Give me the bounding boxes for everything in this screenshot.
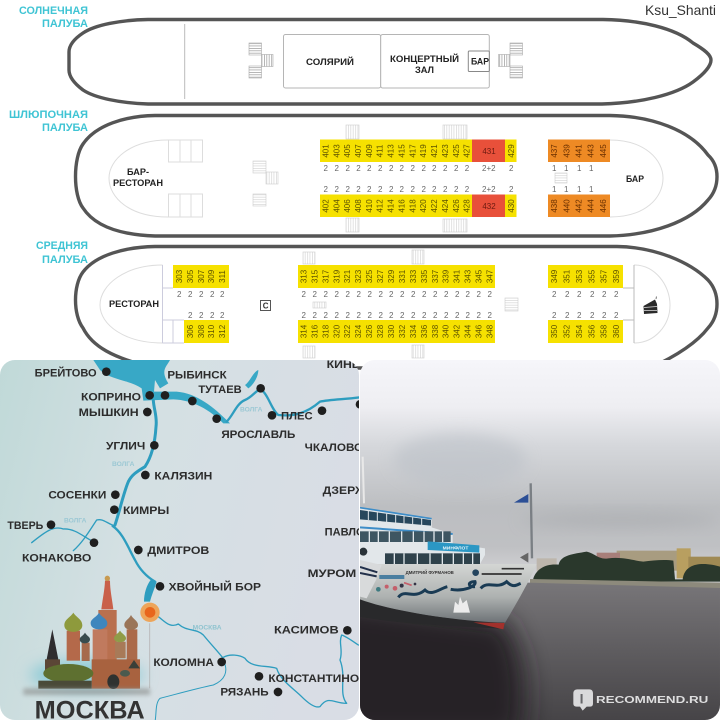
cabins: 313-348: 344 (464, 324, 473, 338)
panel: boat deck (9, 109, 717, 236)
far bank: buildings and trees (530, 548, 720, 588)
berth counts: middle deck (177, 290, 619, 320)
room: bar (468, 51, 489, 72)
cabins: 313-348: 342 (453, 324, 462, 338)
cabins: 437-446: 440 (562, 199, 571, 213)
cabins: 401-429: 426 (452, 199, 461, 213)
hull wave pattern (398, 582, 521, 597)
city names: СОСЕНКИ (48, 490, 106, 502)
ship (359, 457, 537, 629)
cabins: 313-348: 341 (453, 269, 462, 283)
berth counts: boat deck: 1111 (552, 185, 594, 194)
cabins: 401-429: 416 (398, 199, 406, 213)
stairs: left (249, 43, 273, 78)
sky (360, 360, 720, 593)
city names: РЯЗАНЬ (220, 687, 269, 699)
bar-restaurant room: БАР- (127, 167, 149, 177)
cabins: 349-360: 360 (612, 324, 621, 338)
watermark: recommend.ru: RECOMMEND.RU (596, 695, 708, 706)
cabins: 349-360 (548, 265, 623, 343)
cabins: 313-348: 318 (321, 324, 330, 338)
restaurant room (100, 265, 184, 343)
hull graffiti (376, 583, 416, 592)
cabins: 313-348: 345 (475, 269, 484, 283)
cabins: 401-429: 428 (463, 199, 472, 213)
bar room: bow (610, 140, 663, 217)
cabins: 349-360: 359 (612, 269, 621, 283)
heading: middle deck: СРЕДНЯЯ (36, 240, 88, 252)
cabins: 349-360: 349 (550, 269, 559, 283)
city names: ЧКАЛОВСК (305, 442, 370, 454)
room: concert hall: ЗАЛ (415, 65, 434, 75)
Moscow marker (140, 603, 160, 688)
cabins: 349-360: 352 (563, 324, 572, 338)
cabins: 313-348: 324 (354, 324, 363, 338)
superstructure (360, 508, 485, 564)
cabins: 313-348: 337 (431, 269, 440, 283)
cabins: 313-348: 330 (387, 324, 396, 338)
cabins: 401-429: 420 (419, 199, 428, 213)
cabins: 401-429: 408 (354, 199, 363, 213)
cabins: 313-348: 314 (300, 324, 308, 338)
hull stripes and name: ДМИТРИЙ ФУРМАНОВ (406, 570, 454, 575)
cabins: 313-348: 321 (343, 269, 352, 283)
cabins: 401-429: 405 (343, 144, 352, 158)
cabins: 313-348: 313 (300, 269, 308, 283)
bow divider line (184, 24, 186, 99)
cabins: 401-429: 410 (365, 199, 374, 213)
river labels (64, 407, 263, 631)
cabins: 349-360: 356 (587, 324, 596, 338)
cafe room lines (634, 265, 670, 343)
cabins: 349-360: 355 (587, 269, 596, 283)
city names: КИНЕ (327, 359, 360, 371)
cabins: 303-312: 312 (218, 324, 227, 338)
room: solarium (284, 34, 381, 88)
city names: КОПРИНО (81, 392, 141, 404)
cabins: 401-429: 412 (376, 199, 385, 213)
cabins: 303-312: 309 (207, 269, 216, 283)
cabins: 313-348: 319 (332, 269, 341, 283)
berth counts: middle deck: 222222 (552, 290, 619, 299)
cabins: 401-429: 411 (376, 144, 385, 157)
hull outline: middle deck (76, 246, 717, 368)
cabins: 313-348: 317 (321, 269, 330, 283)
main tent tower (98, 576, 117, 660)
cabins: 437-446: 437 (550, 144, 559, 158)
city names: КОЛОМНА (153, 657, 214, 669)
cabins: 401-429: 403 (332, 144, 341, 158)
cabins: 349-360: 353 (575, 269, 584, 283)
base shadows (107, 660, 140, 689)
berth counts: boat deck: 2+2 (482, 164, 496, 173)
room: concert hall: КОНЦЕРТНЫЙ (390, 53, 459, 64)
room: solarium: СОЛЯРИЙ (306, 56, 354, 67)
small green dome (114, 631, 126, 658)
upper windows (360, 508, 432, 526)
cabins: 401-429: 429 (507, 144, 516, 158)
trees (38, 664, 93, 689)
berth counts: boat deck: 22222222222222 (324, 164, 470, 173)
cabins: 437-446 (548, 140, 610, 217)
cabins: 313-348: 325 (365, 269, 374, 283)
city names: КОНСТАНТИНОВО (268, 673, 377, 685)
anchor (453, 597, 470, 613)
cabins: 313-348: 348 (486, 324, 494, 338)
stairs: aft (253, 161, 278, 206)
bar-restaurant room: РЕСТОРАН (113, 178, 163, 188)
berth counts: boat deck: 2 (509, 164, 514, 173)
city names: РЫБИНСК (167, 369, 227, 381)
river labels: ВОЛГА (112, 461, 135, 468)
cabins: 401-429: 413 (387, 144, 396, 158)
cabins: 303-312: 307 (197, 269, 206, 283)
dark spire tower (45, 629, 60, 673)
city names: МЫШКИН (79, 407, 139, 419)
room: bar: БАР (471, 56, 489, 66)
hull (360, 564, 537, 623)
cabins: 401-429: 430 (507, 199, 516, 213)
cabins: 313-348: 333 (409, 269, 418, 283)
cabins: 313-348: 346 (475, 324, 484, 338)
heading: boat deck: ШЛЮПОЧНАЯ (9, 109, 88, 121)
cabins: 313-348: 323 (354, 269, 363, 283)
stairs: right (498, 43, 522, 78)
cabins: 303-312 (173, 265, 229, 343)
cabins: 401-429: 418 (408, 199, 417, 213)
panel: route map (0, 359, 377, 720)
heading: middle deck: ПАЛУБА (42, 254, 88, 266)
cabins: 303-312: 306 (186, 324, 195, 338)
berth counts: middle deck: 22222 (177, 290, 225, 299)
cabins: 313-348: 332 (398, 324, 407, 338)
panel: sun deck (19, 5, 711, 104)
cabins: 401-429: 417 (408, 144, 417, 158)
cabins: 313-348: 338 (431, 324, 440, 338)
city names: КОНАКОВО (22, 552, 92, 564)
cabins: 401-429: 406 (343, 199, 352, 213)
berth counts: boat deck (324, 164, 594, 194)
cabins: 401-429: 414 (387, 199, 396, 213)
cabins: 401-429: 402 (321, 199, 330, 213)
cabins: 401-429: 409 (365, 144, 374, 158)
cabins: 303-312: 308 (197, 324, 206, 338)
city names: ДЗЕРЖ (323, 485, 367, 497)
cabins: 401-429: 425 (452, 144, 461, 158)
city names (7, 359, 377, 699)
icon: cake (644, 296, 658, 314)
city names: КАСИМОВ (274, 625, 339, 637)
rivers (32, 360, 360, 720)
lifeboats (168, 140, 202, 217)
river labels: ВОЛГА (240, 407, 263, 414)
water (327, 583, 720, 720)
city names: ТУТАЕВ (198, 384, 242, 396)
cabins: 313-348: 334 (409, 324, 418, 338)
city names: ЯРОСЛАВЛЬ (221, 429, 295, 441)
river labels: ВОЛГА (64, 518, 87, 525)
city names: УГЛИЧ (106, 441, 145, 453)
mast and flag (363, 457, 532, 563)
cabins: 303-312: 305 (186, 269, 195, 283)
berth counts: middle deck: 222222222222222222 (302, 311, 492, 320)
hull outline: sun deck (69, 20, 711, 104)
heading: sun deck (19, 5, 88, 30)
river labels: МОСКВА (193, 624, 222, 631)
stairs: middle deck (303, 250, 518, 358)
heading: sun deck: СОЛНЕЧНАЯ (19, 5, 88, 17)
bar room: bow: БАР (626, 174, 644, 184)
city names: ДМИТРОВ (147, 545, 209, 557)
heading: boat deck (9, 109, 88, 134)
cabins: 349-360: 357 (600, 269, 609, 283)
city names: МУРОМ (308, 568, 356, 580)
cabins: 313-348: 347 (486, 269, 494, 283)
cabins: 313-348: 316 (310, 324, 319, 338)
cabins: 313-348 (298, 265, 495, 343)
cabins: 303-312: 310 (207, 324, 216, 338)
watermark: recommend.ru (573, 689, 708, 711)
cabins: 401-429: 424 (441, 199, 450, 213)
cathedral base (92, 659, 140, 689)
name sign: МИНФЛОТ (443, 545, 468, 551)
watermark: Ksu_Shanti: Ksu_Shanti (645, 2, 716, 18)
berth counts: boat deck: 2 (509, 185, 514, 194)
cabins: 401-429: 432 (482, 202, 496, 211)
cabins: 313-348: 326 (365, 324, 374, 338)
cabins: 437-446: 444 (587, 199, 596, 213)
cabins: 401-429: 427 (463, 144, 472, 158)
watermark: recommend.ru: I (580, 690, 584, 706)
cabins: 313-348: 320 (332, 324, 341, 338)
city names: КАЛЯЗИН (154, 471, 212, 483)
room: concert hall (381, 34, 489, 88)
cabins: 313-348: 335 (420, 269, 429, 283)
berth counts: middle deck: 222222222222222222 (302, 290, 492, 299)
cabins: 401-429: 415 (398, 144, 406, 158)
cabins: 401-429: 423 (441, 144, 450, 158)
icon: service room C (260, 300, 270, 310)
city names: ХВОЙНЫЙ БОР (169, 581, 261, 594)
cabins: 313-348: 327 (376, 269, 385, 283)
cabins: 313-348: 315 (310, 269, 319, 283)
berth counts: boat deck: 2+2 (482, 185, 496, 194)
stairs: side (346, 125, 567, 232)
cabins: 349-360: 358 (600, 324, 609, 338)
cabins: 303-312: 311 (218, 270, 227, 283)
cabins: 401-429: 404 (332, 199, 341, 213)
tower with brown dome (124, 615, 138, 661)
cabins: 313-348: 322 (343, 324, 352, 338)
Moscow label band (23, 688, 150, 720)
heading: middle deck (36, 240, 88, 266)
tower with green dome (64, 613, 82, 661)
city names: БРЕЙТОВО (35, 367, 97, 380)
illustration: Saint Basil's Cathedral (30, 576, 143, 690)
emblem (359, 548, 367, 556)
cabins: 313-348: 336 (420, 324, 429, 338)
small dark dome (80, 633, 90, 661)
middle windows (360, 527, 453, 542)
cabins: 437-446: 439 (562, 144, 571, 158)
name sign (428, 541, 479, 553)
berth counts: middle deck: 222222 (552, 311, 619, 320)
bar-restaurant room (109, 140, 168, 217)
cabins: 349-360: 351 (563, 269, 572, 283)
cabins: 303-312: 303 (175, 269, 184, 283)
tender boat (360, 560, 382, 598)
berth counts: boat deck: 22222222222222 (324, 185, 470, 194)
city markers (47, 367, 364, 696)
cabins: 349-360: 350 (550, 324, 559, 338)
cabins: 437-446: 442 (574, 199, 584, 213)
cabins: 401-429: 431 (482, 147, 496, 156)
city names: ПАВЛО (325, 526, 365, 538)
city names: КИМРЫ (123, 505, 169, 517)
cabins: 401-429: 421 (430, 144, 439, 158)
cabins: 437-446: 445 (599, 144, 608, 158)
tower with blue dome (91, 613, 107, 661)
heading: boat deck: ПАЛУБА (42, 122, 88, 134)
berth counts: middle deck: 2222 (188, 311, 225, 320)
hull outline: boat deck (76, 116, 717, 236)
panel: ship photo (327, 360, 720, 720)
cabins: 437-446: 443 (587, 144, 596, 158)
lower windows (385, 553, 480, 564)
waterline (360, 599, 505, 629)
panel: middle deck (36, 240, 717, 368)
cabins: 313-348: 343 (464, 269, 473, 283)
cabins: 437-446: 438 (550, 199, 559, 213)
restaurant room: РЕСТОРАН (109, 299, 159, 309)
berth counts: boat deck: 1111 (552, 164, 594, 173)
icon: service room C: С (263, 302, 269, 310)
cabins: 313-348: 328 (376, 324, 385, 338)
city names: ПЛЕС (281, 411, 313, 423)
cabins: 401-429: 401 (321, 144, 330, 158)
cabins: 401-429 (320, 140, 516, 217)
cabins: 401-429: 422 (430, 199, 439, 213)
cabins: 313-348: 340 (442, 324, 451, 338)
cabins: 313-348: 331 (398, 269, 407, 283)
cabins: 401-429: 419 (419, 144, 428, 158)
cabins: 437-446: 441 (574, 144, 584, 158)
cabins: 437-446: 446 (599, 199, 608, 213)
city names: ТВЕРЬ (7, 520, 43, 532)
hull stripes and name (379, 569, 524, 579)
cabins: 349-360: 354 (575, 324, 584, 338)
cabins: 313-348: 339 (442, 269, 451, 283)
heading: sun deck: ПАЛУБА (42, 18, 88, 30)
cabins: 313-348: 329 (387, 269, 396, 283)
cabins: 401-429: 407 (354, 144, 363, 158)
